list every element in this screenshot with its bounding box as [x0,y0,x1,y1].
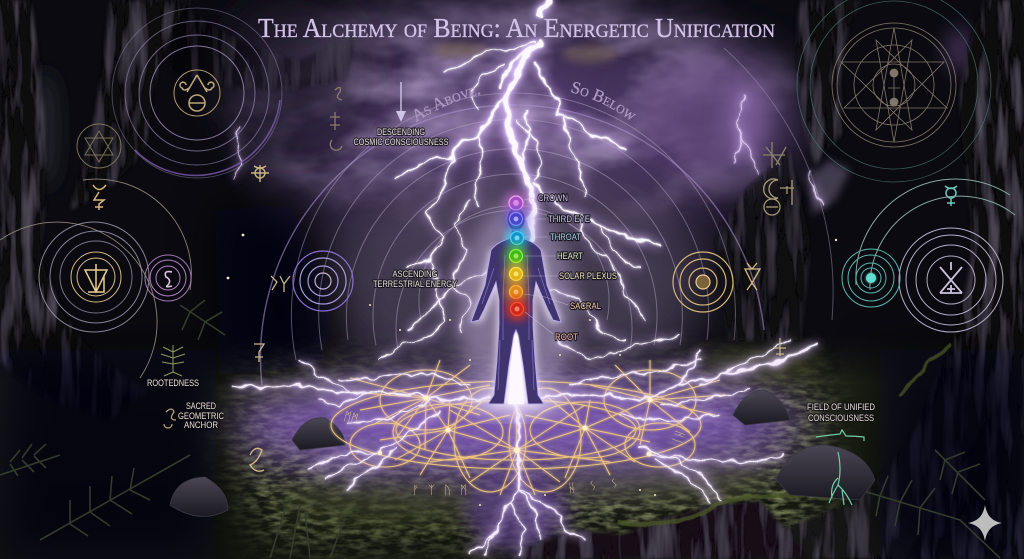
label: field of unified consciousness: FIELD OF UNIFIED [807,402,875,412]
icon: sparkle watermark [968,505,1002,541]
label: sacred geometric anchor [178,401,224,430]
icon: right alchemical rings [856,179,1015,332]
label: descending cosmic consciousness: COSMIC CONSCIOUSNESS [354,137,448,147]
rune marks on the ground: ᛁᚺᛁ [670,422,690,447]
icon: gold ring right of figure [673,252,733,312]
chakra: root [505,297,529,321]
label: ascending terrestrial energy: TERRESTRIAL ENERGY [373,279,457,289]
soft dark masses at the forest edges [0,205,1024,559]
lightning: upper bolt and branches [380,0,680,360]
icon: star in circle [77,124,121,168]
rune marks on the ground: ᛗᛗ [342,409,360,426]
label: ascending terrestrial energy [373,269,457,289]
label: field of unified consciousness: CONSCIOUSNESS [808,413,874,423]
label: sacred geometric anchor: SACRED [186,401,216,411]
label: rootedness: ROOTEDNESS [147,378,199,388]
label: root: ROOT [555,332,578,343]
icon: left mercury symbol [93,185,106,210]
title: The Alchemy of Being: An Energetic Unification [258,13,775,43]
icon: mercury teal [945,186,957,206]
light column and aura behind the figure [458,205,574,415]
icon: left alchemical rings [0,179,191,378]
icon: teal glowing ring [842,249,900,307]
label: ascending terrestrial energy: ASCENDING [392,269,438,279]
chakra column [503,190,529,321]
label: field of unified consciousness [807,402,875,423]
label: sacred geometric anchor: ANCHOR [184,420,218,430]
rocks [170,390,875,516]
arrow: descending [396,82,406,122]
moss ridge [620,345,950,524]
icon: right top sigil [797,0,991,182]
label: third eye: THIRD EYE [548,214,590,225]
label: descending cosmic consciousness: DESCENDING [377,127,425,137]
label: crown: CROWN [538,193,568,204]
chakra: crown [503,190,529,216]
human figure [471,207,561,404]
chakra: solar plexus [504,262,528,286]
icon: blue-purple ring left of figure [293,251,353,311]
concentric energy rings around the figure [260,48,833,385]
icon: top-left alchemical rings [112,8,282,178]
rune marks on the ground: ᚠ ᛉ ᚢ ᛗ [412,483,467,497]
chakra: sacral [504,280,528,304]
label: descending cosmic consciousness [354,127,448,147]
label: heart: HEART [557,251,583,262]
chakra: throat [505,226,529,250]
chakra: heart [504,244,528,268]
fireflies and sparks [227,234,837,506]
label: sacral: SACRAL [570,301,602,312]
icon: small glyph upper left [251,165,269,182]
curved text: as above: As Above. [414,88,480,122]
chakra leader lines [524,198,568,334]
sacred geometry ground mandala [331,360,725,495]
chakra: third eye [504,207,528,231]
label: throat: THROAT [550,232,581,243]
icon: small purple ring [145,255,191,301]
chakra labels [538,193,617,343]
curved text: so below: So Below [571,82,636,120]
ground lightning spreading from the feet [235,340,815,555]
label: sacred geometric anchor: GEOMETRIC [178,411,224,421]
gold mandala nodes [378,396,652,456]
icon: scattered alchemical glyphs [164,87,794,471]
icon: unified consciousness teal roots [816,430,864,505]
twisted roots at lower right [510,370,1000,559]
label: solar plexus: SOLAR PLEXUS [559,271,617,282]
icon: rootedness plant [161,345,185,376]
rune marks on the ground: ᚺ ᛊ ᛊ [567,476,619,495]
ferns and foliage [0,300,1000,558]
distant storm lightning [234,95,822,205]
rune marks on the ground [342,409,690,497]
